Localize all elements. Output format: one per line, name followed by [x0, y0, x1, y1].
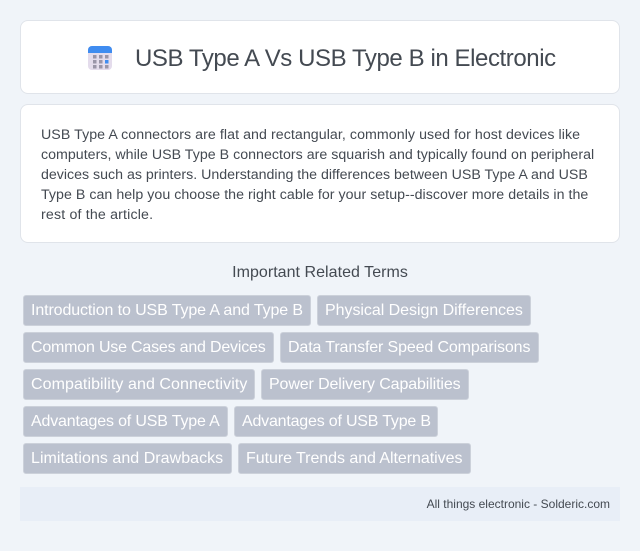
tag: Limitations and Drawbacks: [31, 450, 223, 467]
term tags: [23, 295, 539, 474]
tag: Power Delivery Capabilities: [269, 376, 461, 393]
tag: Introduction to USB Type A and Type B: [31, 302, 303, 319]
footer bar: All things electronic - Solderic.com: [427, 497, 610, 511]
title: USB Type A Vs USB Type B in Electronic: [135, 45, 556, 72]
intro paragraph: devices such as printers. Understanding the differences between USB Type A and USB: [41, 167, 588, 183]
tag: [23, 369, 255, 400]
tag: Data Transfer Speed Comparisons: [288, 339, 530, 356]
tag: [23, 295, 311, 326]
tag: Compatibility and Connectivity: [31, 376, 247, 393]
tag: [23, 406, 228, 437]
tag: Advantages of USB Type B: [242, 413, 431, 430]
intro paragraph: rest of the article.: [41, 207, 153, 223]
tag: Future Trends and Alternatives: [246, 450, 462, 467]
tag: [23, 443, 232, 474]
intro text card: [20, 104, 620, 243]
tag: [234, 406, 438, 437]
tag: Physical Design Differences: [325, 302, 523, 319]
tag: [238, 443, 471, 474]
intro paragraph: Type B can help you choose the right cable for your setup--discover more details in the: [41, 187, 588, 203]
footer bar: [20, 487, 620, 521]
icon: calendar: [88, 46, 112, 70]
intro paragraph: USB Type A connectors are flat and rectangular, commonly used for host devices like: [41, 127, 580, 143]
header card: [20, 20, 620, 94]
tag: [280, 332, 539, 363]
intro paragraph: computers, while USB Type B connectors are squarish and typically found on peripheral: [41, 147, 594, 163]
intro paragraph: [41, 127, 594, 223]
tag: [23, 332, 274, 363]
tag: [261, 369, 469, 400]
section heading: Important Related Terms: [232, 264, 408, 281]
tag: Advantages of USB Type A: [31, 413, 220, 430]
tag: [317, 295, 531, 326]
tag: Common Use Cases and Devices: [31, 339, 266, 356]
